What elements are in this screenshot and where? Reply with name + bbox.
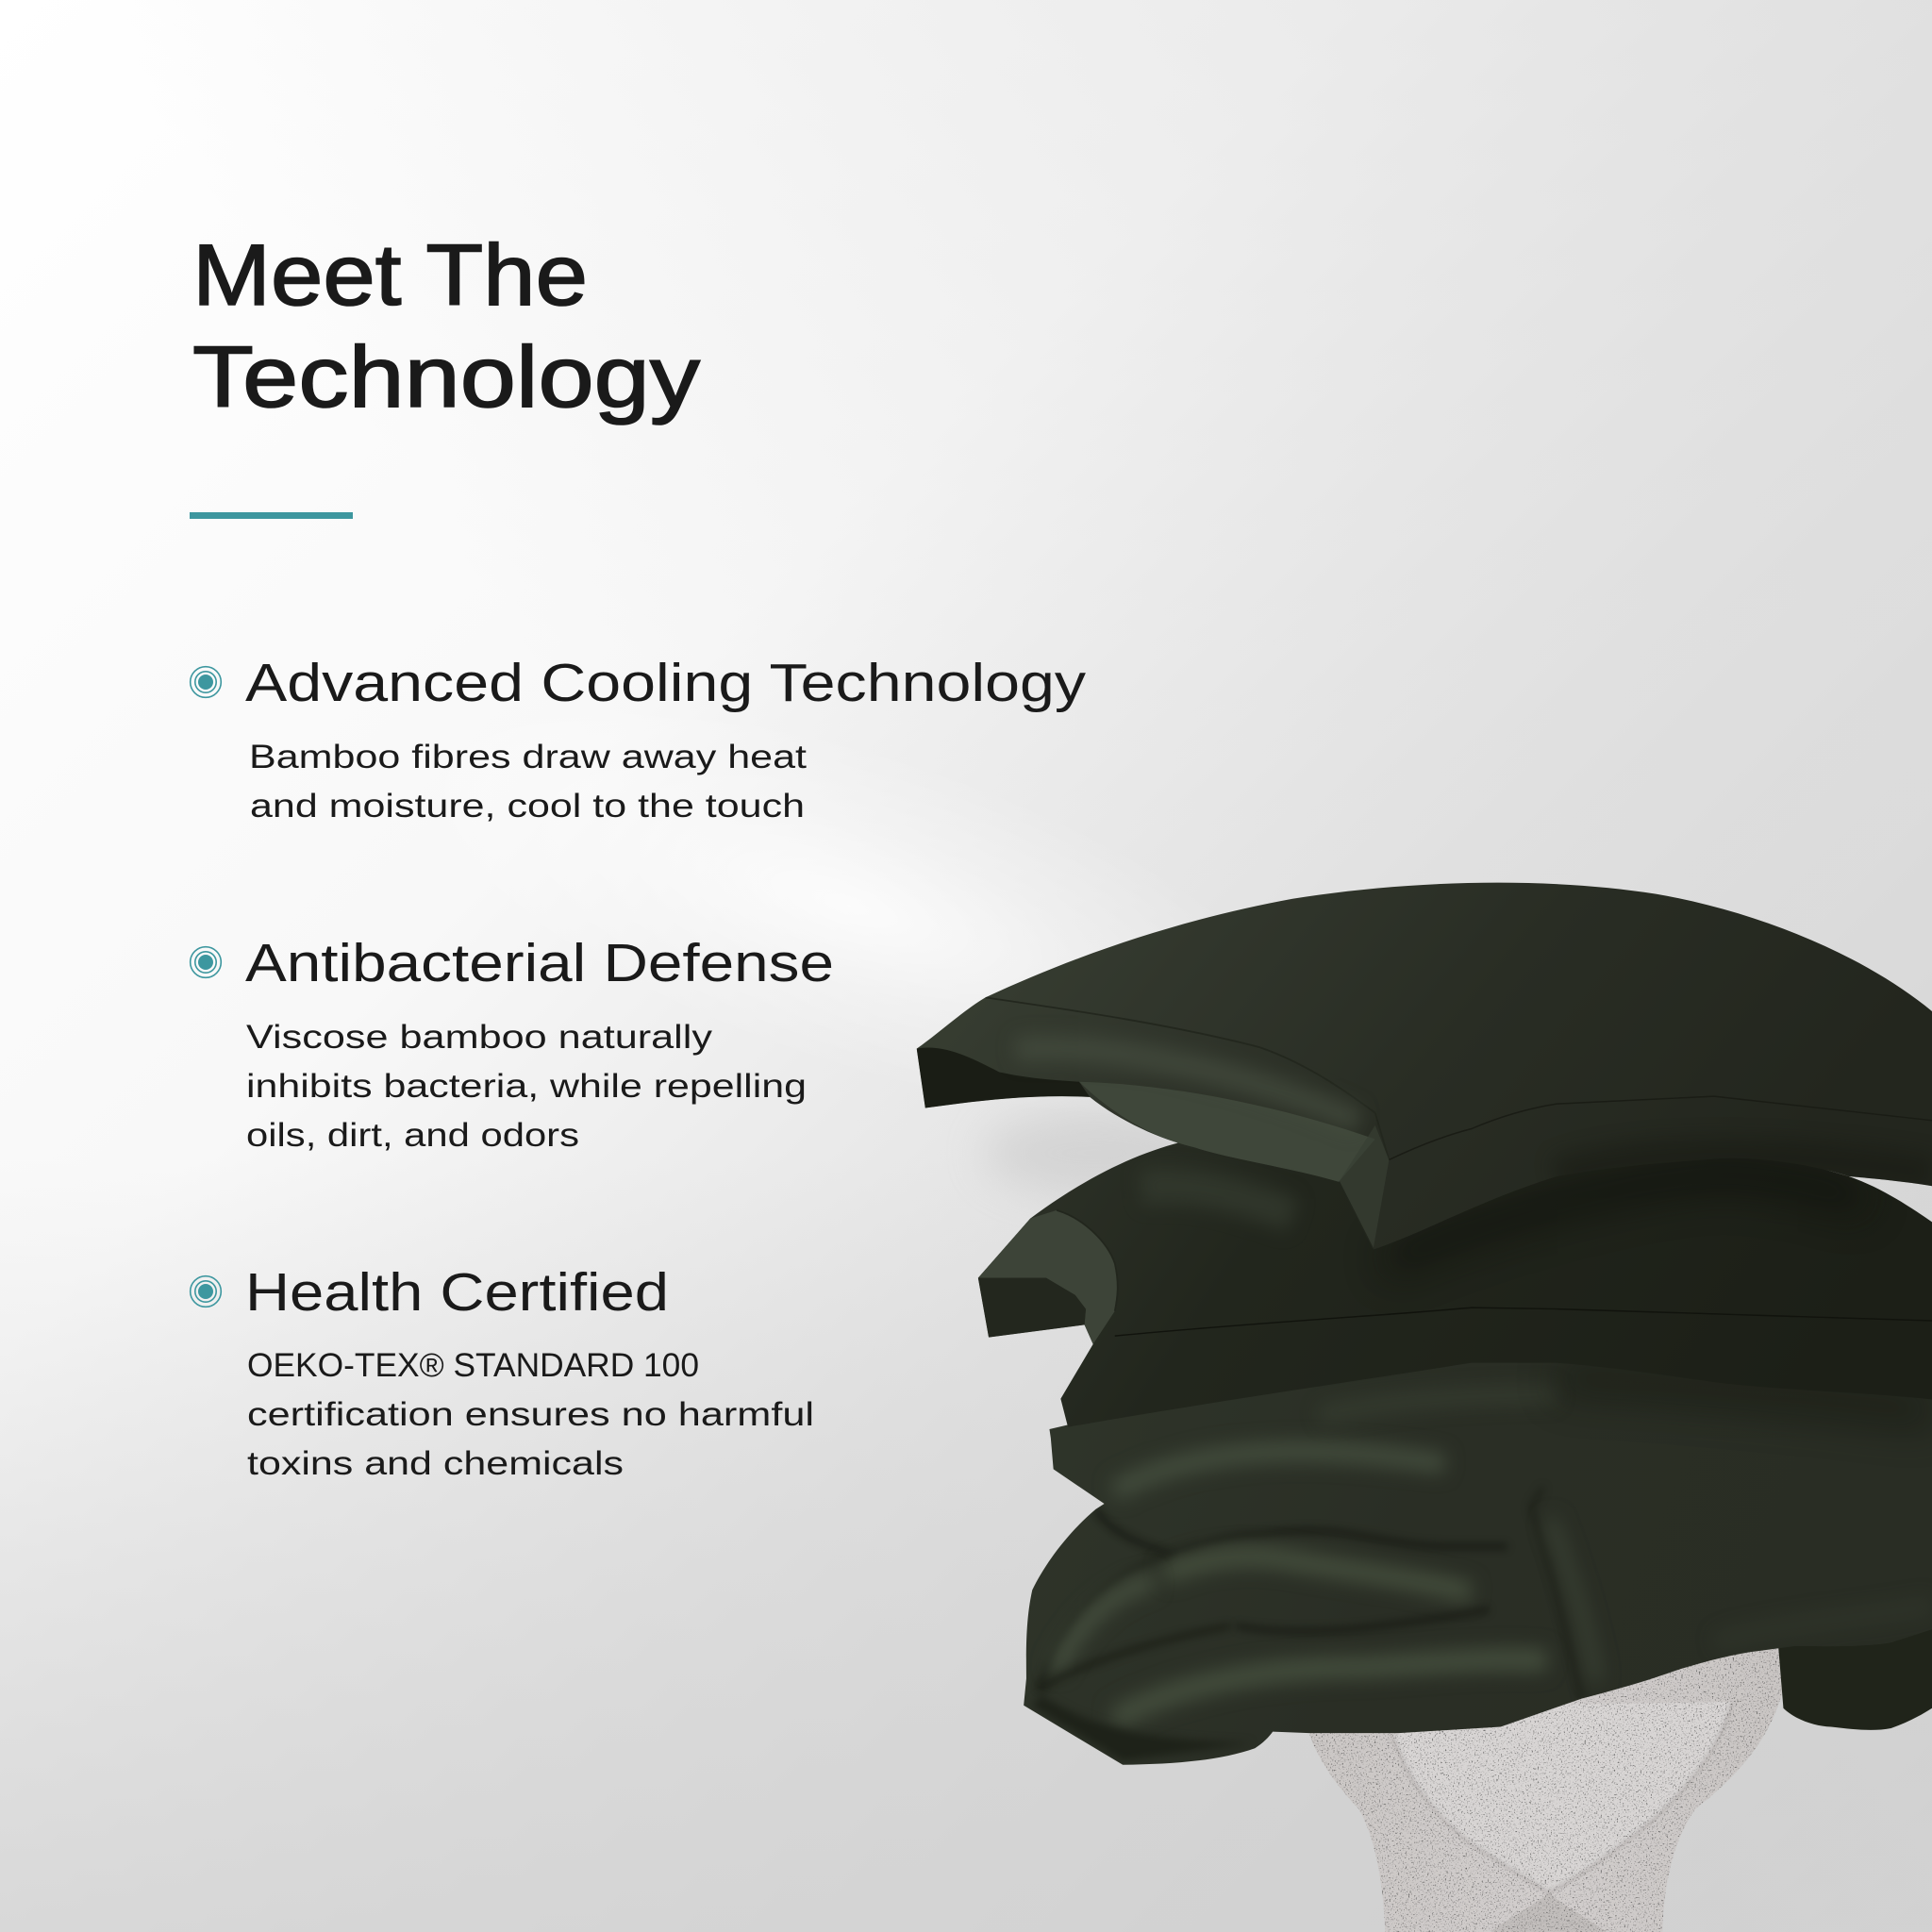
title: Technology bbox=[192, 329, 700, 425]
icon: health bullet bbox=[191, 1276, 221, 1307]
heading: health certified: Health Certified bbox=[245, 1262, 669, 1323]
description: health: certification ensures no harmful bbox=[247, 1396, 814, 1433]
description: health bbox=[247, 1347, 814, 1482]
description: cooling bbox=[249, 739, 807, 824]
top pillow bbox=[917, 883, 1932, 1250]
lower pillow flap bbox=[978, 1210, 1118, 1344]
description: antibacterial bbox=[246, 1019, 807, 1154]
top pillow lighter underside bbox=[1079, 1082, 1375, 1182]
icon: cooling bullet bbox=[191, 667, 221, 697]
feature: advanced cooling technology bbox=[191, 653, 1087, 824]
feature: health certified bbox=[191, 1262, 814, 1482]
accent divider bar bbox=[190, 512, 353, 519]
title: Meet The bbox=[192, 227, 588, 324]
description: antibacterial: Viscose bamboo naturally bbox=[246, 1019, 713, 1056]
description: cooling: Bamboo fibres draw away heat bbox=[249, 739, 807, 775]
top pillow dark flap interior bbox=[917, 1047, 1090, 1108]
icon: antibacterial bullet bbox=[191, 947, 221, 977]
description: antibacterial: oils, dirt, and odors bbox=[246, 1117, 579, 1154]
description: health: OEKO-TEX® STANDARD 100 bbox=[247, 1347, 699, 1384]
folded duvet bbox=[1024, 1341, 1932, 1765]
description: cooling: and moisture, cool to the touch bbox=[250, 788, 805, 824]
lower pillow bbox=[978, 1139, 1932, 1427]
heading: antibacterial defense: Antibacterial Defense bbox=[245, 933, 834, 993]
feature: antibacterial defense bbox=[191, 933, 834, 1154]
statue head bbox=[1309, 1643, 1790, 1932]
product photo: bedding stack on statue head bbox=[917, 883, 1932, 1932]
title bbox=[192, 227, 700, 425]
description: antibacterial: inhibits bacteria, while repelling bbox=[246, 1068, 807, 1105]
description: health: toxins and chemicals bbox=[247, 1445, 624, 1482]
soft shadow behind stack bbox=[982, 1111, 1207, 1194]
heading: advanced cooling technology: Advanced Cooling Technology bbox=[245, 653, 1087, 713]
